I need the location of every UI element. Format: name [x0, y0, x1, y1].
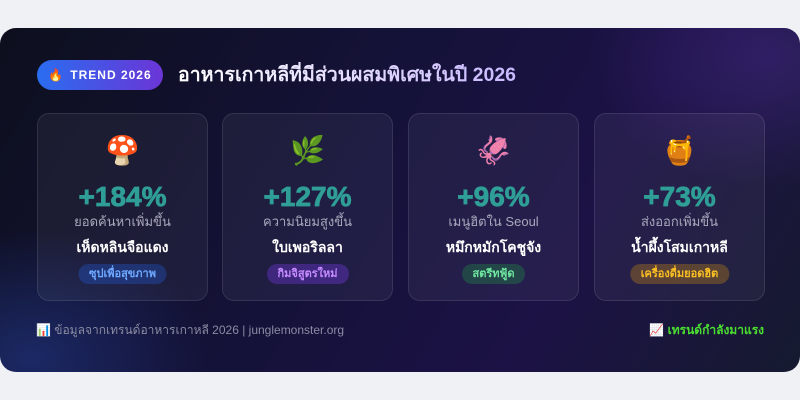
icon: squid: 🦑 [476, 135, 511, 166]
name: น้ำผึ้งโสมเกาหลี [631, 239, 728, 255]
tag: ซุปเพื่อสุขภาพ [89, 268, 156, 280]
tag [462, 264, 525, 284]
stat: +96% [457, 181, 530, 212]
card: squid [408, 113, 579, 301]
name: เห็ดหลินจือแดง [76, 239, 169, 255]
card: mushroom [37, 113, 208, 301]
tag [266, 264, 348, 284]
footer source: 📊 ข้อมูลจากเทรนด์อาหารเกาหลี 2026 | junglemonster.org [36, 323, 344, 337]
badge: trend 2026: 🔥 [48, 68, 64, 82]
icon: honey pot: 🍯 [662, 135, 697, 166]
card: perilla [222, 113, 393, 301]
label: ส่งออกเพิ่มขึ้น [641, 214, 718, 229]
badge: trend 2026: TREND 2026 [70, 68, 152, 82]
icon: herb: 🌿 [290, 135, 325, 166]
name: หมึกหมักโคชูจัง [446, 239, 541, 255]
stat: +127% [264, 181, 351, 212]
footer trend note: 📈 เทรนด์กำลังมาแรง [649, 323, 764, 337]
stat: +73% [643, 181, 716, 212]
tag [630, 264, 729, 284]
stat: +184% [79, 181, 166, 212]
label: ความนิยมสูงขึ้น [263, 214, 352, 229]
badge: trend 2026 [37, 60, 163, 90]
title: อาหารเกาหลีที่มีส่วนผสมพิเศษในปี 2026 [178, 64, 516, 86]
tag: สตรีทฟู้ด [473, 268, 514, 280]
name: ใบเพอริลลา [272, 239, 343, 255]
card: honey [594, 113, 765, 301]
tag [78, 264, 167, 284]
icon: mushroom: 🍄 [105, 135, 140, 166]
tag: กิมจิสูตรใหม่ [278, 268, 338, 280]
label: ยอดค้นหาเพิ่มขึ้น [74, 214, 171, 229]
tag: เครื่องดื่มยอดฮิต [641, 268, 718, 280]
label: เมนูฮิตใน Seoul [448, 214, 539, 229]
